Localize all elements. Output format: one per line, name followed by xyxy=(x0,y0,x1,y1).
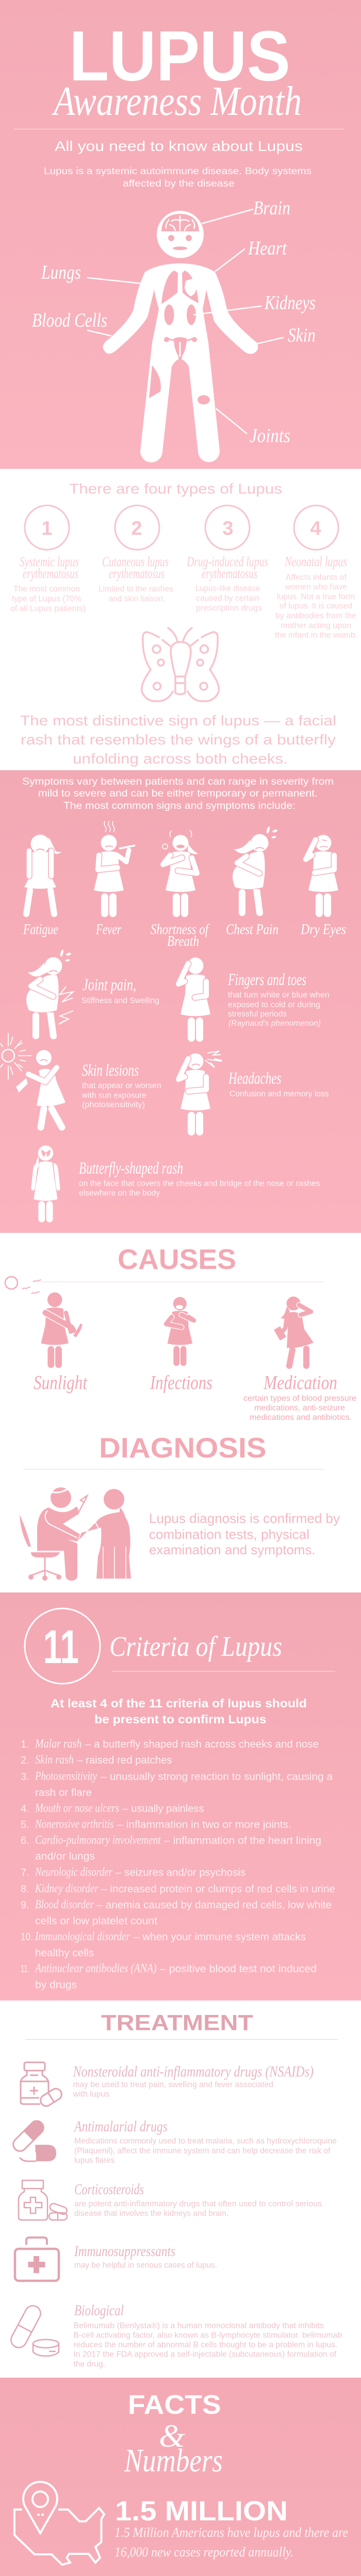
symptom: dry eyes: Dry Eyes xyxy=(300,921,346,938)
type 1: The most common xyxy=(13,585,80,594)
symptom: butterfly-shaped rash xyxy=(31,1145,320,1222)
symptom: joint pain: Stiffness and Swelling xyxy=(81,996,159,1005)
criteria list: – increased protein or clumps of red cells in urine xyxy=(101,1884,335,1895)
fact: 1.5 million: 1.5 MILLION xyxy=(115,2496,288,2527)
intro text: affected by the disease xyxy=(123,178,235,189)
heading: diagnosis: DIAGNOSIS xyxy=(99,1432,266,1464)
criteria list xyxy=(21,1737,335,1991)
panel: causes and diagnosis xyxy=(0,1233,361,1592)
heading: causes: CAUSES xyxy=(118,1243,236,1275)
criteria list: 11. xyxy=(21,1963,29,1975)
criteria list: rash or flare xyxy=(35,1787,92,1799)
treatment: NSAIDs xyxy=(21,2062,314,2108)
heading: Criteria of Lupus xyxy=(109,1631,282,1662)
symptom: fatigue: Fatigue xyxy=(23,921,58,938)
fact: 1.5 million xyxy=(14,2482,348,2565)
butterfly statement: rash that resembles the wings of a butterfly xyxy=(21,732,336,748)
symptom: butterfly-shaped rash: Butterfly-shaped rash xyxy=(79,1159,183,1178)
icon: first aid kit xyxy=(15,2238,59,2281)
intro heading: All you need to know about Lupus xyxy=(55,138,303,154)
symptom: headaches: Confusion and memory loss xyxy=(229,1090,329,1098)
type 3: prescription drugs xyxy=(196,604,262,613)
diagnosis text: Lupus diagnosis is confirmed by xyxy=(149,1511,340,1526)
symptom: dry eyes xyxy=(300,835,346,938)
treatment: antimalarial: (Plaquenil), affect the immune system and can help decrease the risk of xyxy=(74,2146,331,2155)
criteria summary: At least 4 of the 11 criteria of lupus should xyxy=(51,1697,307,1710)
badge: 11: 11 xyxy=(43,1621,79,1673)
label: Lungs xyxy=(41,262,140,283)
criteria list: 10. xyxy=(21,1931,33,1943)
symptom: joint pain xyxy=(26,950,159,1039)
treatment: biological xyxy=(8,2302,342,2368)
butterfly statement: unfolding across both cheeks. xyxy=(73,751,288,767)
symptom: shortness of breath: Breath xyxy=(167,933,199,950)
type 4: of lupus. It is caused xyxy=(280,602,352,611)
symptom: fingers and toes: (Raynaud's phenomenon) xyxy=(228,1019,321,1028)
symptom: fingers and toes: that turn white or blue when xyxy=(228,991,330,999)
label: Skin: Skin xyxy=(288,325,316,346)
intro text xyxy=(44,165,311,189)
symptom: skin lesions xyxy=(0,1033,161,1127)
icon: bottle with cross xyxy=(19,2180,68,2220)
symptom: skin lesions: (photosensitivity) xyxy=(82,1100,145,1109)
type 3: 3 xyxy=(222,518,234,539)
type 1: Systemic lupus xyxy=(20,554,79,569)
treatment: NSAIDs: may be used to treat pain, swelling and fever associated xyxy=(73,2080,273,2089)
treatment: NSAIDs: with lupus xyxy=(72,2090,110,2099)
treatment: antimalarial xyxy=(10,2118,337,2165)
label: Heart: Heart xyxy=(248,238,287,259)
criteria list: Nonerosive arthritis xyxy=(35,1818,113,1831)
cause: medication: Medication xyxy=(263,1372,337,1394)
label: Blood Cells: Blood Cells xyxy=(32,310,107,331)
cause: sunlight: Sunlight xyxy=(34,1372,88,1394)
criteria list: 5. xyxy=(21,1819,29,1831)
criteria list: Blood disorder xyxy=(35,1898,94,1911)
icon: thigh skin xyxy=(149,365,161,398)
butterfly statement: The most distinctive sign of lupus — a facial xyxy=(20,713,336,728)
symptom: fatigue xyxy=(23,835,62,938)
cause: medication: medications and antibiotics. xyxy=(250,1413,352,1422)
panel: treatment xyxy=(0,2001,361,2378)
symptom: fingers and toes xyxy=(178,958,330,1042)
icon: sun xyxy=(0,1033,31,1079)
symptom: fever xyxy=(94,821,135,938)
symptom: skin lesions: Skin lesions xyxy=(82,1061,139,1080)
treatment: biological: reduces the number of abnormal B cells thought to be a problem in lupus. xyxy=(73,2341,337,2349)
panel: facts and numbers xyxy=(0,2378,361,2576)
icon: capsule and jar xyxy=(8,2303,59,2356)
icon: body silhouette xyxy=(103,263,258,463)
type 1: 1 xyxy=(41,518,53,539)
type 3: Lupus-like disease xyxy=(195,584,260,593)
label: Lungs: Lungs xyxy=(41,262,81,283)
title: LUPUS xyxy=(69,16,290,96)
criteria list: and/or lungs xyxy=(35,1851,95,1862)
treatment: corticosteroids: disease that involves the kidneys and brain. xyxy=(74,2209,228,2218)
criteria list: – usually painless xyxy=(123,1803,204,1815)
symptom: shortness of breath: Shortness of xyxy=(151,921,210,938)
panel: four types of lupus xyxy=(0,469,361,770)
icon: doctor and patient xyxy=(20,1487,131,1581)
treatment: biological: In 2017 the FDA approved a self-injectable (subcutaneous) formulation of xyxy=(73,2350,337,2359)
icon: head xyxy=(157,211,204,258)
icon: heart xyxy=(185,278,196,296)
criteria list: Photosensitivity xyxy=(35,1770,97,1783)
treatment: biological: Belimumab (Benlysta®) is a human monoclonal antibody that inhibits xyxy=(73,2321,324,2330)
symptom: shortness of breath xyxy=(151,831,210,950)
type 3: caused by certain xyxy=(196,594,259,603)
treatment: biological: the drug. xyxy=(73,2360,105,2368)
heading: FACTS xyxy=(128,2390,221,2420)
criteria list: Kidney disorder xyxy=(35,1882,99,1895)
panel: symptoms xyxy=(0,770,361,1233)
criteria list: – when your immune system attacks xyxy=(134,1931,306,1943)
icon: lungs xyxy=(161,270,199,304)
criteria list: Cardio-pulmonary involvement xyxy=(35,1834,161,1847)
panel: 11 criteria of lupus xyxy=(0,1592,361,2001)
treatment: biological: B-cell activating factor, also known as B-lymphocyte stimulator. belimumab xyxy=(73,2331,342,2340)
badge: 11 xyxy=(25,1608,100,1684)
symptom: joint pain: Joint pain, xyxy=(83,976,136,994)
treatment: biological: Biological xyxy=(74,2302,124,2319)
icon: knee joint xyxy=(198,395,210,404)
criteria list: – seizures and/or psychosis xyxy=(116,1867,245,1878)
symptoms intro: mild to severe and can be either temporary or permanent. xyxy=(38,788,318,799)
symptom: fingers and toes: stressful periods xyxy=(228,1010,287,1019)
type 1: of all Lupus patients) xyxy=(10,604,86,613)
cause: medication: medications, anti-seizure xyxy=(254,1403,345,1413)
criteria list: – inflammation of the heart lining xyxy=(164,1835,321,1846)
criteria list: 7. xyxy=(21,1867,29,1878)
symptom: chest pain xyxy=(226,826,278,938)
symptom: headaches xyxy=(178,1051,329,1136)
symptom: skin lesions: that appear or worsen xyxy=(82,1081,161,1090)
criteria summary: be present to confirm Lupus xyxy=(94,1713,266,1726)
treatment: immunosuppressants: Immunosuppressants xyxy=(74,2243,175,2260)
cause: medication: certain types of blood pressure xyxy=(243,1394,356,1403)
symptom: fever: Fever xyxy=(95,921,122,938)
type 4: the infant in the womb. xyxy=(275,631,357,640)
symptom: fingers and toes: Fingers and toes xyxy=(227,971,306,989)
treatment: corticosteroids: are potent anti-inflammatory drugs that often used to control serious xyxy=(74,2200,322,2209)
type 1: erythematosus xyxy=(23,566,78,581)
icon: capsules xyxy=(10,2118,56,2161)
label: Heart xyxy=(215,238,287,272)
criteria list: by drugs xyxy=(35,1979,77,1991)
cause: sunlight xyxy=(5,1277,88,1394)
criteria list: – unusually strong reaction to sunlight, causing a xyxy=(101,1771,333,1783)
criteria list: 1. xyxy=(21,1739,29,1750)
intro text: Lupus is a systemic autoimmune disease. Body systems xyxy=(44,165,311,176)
type 2 xyxy=(99,505,173,603)
treatment: corticosteroids xyxy=(19,2180,322,2220)
label: Joints xyxy=(216,409,290,447)
label: Joints: Joints xyxy=(250,425,290,447)
icon: uterus xyxy=(164,337,197,359)
criteria list: 8. xyxy=(21,1884,29,1895)
symptoms intro: The most common signs and symptoms include: xyxy=(63,801,296,811)
type 2: Cutaneous lupus xyxy=(102,554,169,569)
treatment: immunosuppressants xyxy=(15,2238,217,2281)
symptom: skin lesions: with sun exposure xyxy=(81,1091,146,1100)
diagnosis text xyxy=(149,1511,340,1557)
treatment: antimalarial: Antimalarial drugs xyxy=(73,2118,168,2135)
heading: TREATMENT xyxy=(101,2011,253,2036)
type 2: and skin liaison. xyxy=(109,595,165,603)
criteria list: 6. xyxy=(21,1835,29,1846)
treatment: antimalarial: lupus flares xyxy=(74,2156,114,2165)
type 4: by antibodies from the xyxy=(275,612,356,620)
symptom: butterfly-shaped rash: elsewhere on the body xyxy=(79,1189,160,1197)
criteria list: – inflammation in two or more joints. xyxy=(117,1819,291,1831)
symptom: butterfly-shaped rash: on the face that covers the cheeks and bridge of the nose or rashes xyxy=(79,1179,320,1188)
type 1 xyxy=(10,505,86,613)
type 4: 4 xyxy=(310,518,321,539)
criteria list: healthy cells xyxy=(35,1947,94,1959)
criteria list: Immunological disorder xyxy=(35,1930,130,1943)
cause: infections: Infections xyxy=(150,1372,212,1394)
fact: 1.5 million: 16,000 new cases reported annually. xyxy=(114,2545,293,2560)
criteria list: – a butterfly shaped rash across cheeks and nose xyxy=(85,1739,319,1750)
type 4: mother acting upon xyxy=(281,621,351,630)
type 3: erythematosus xyxy=(202,566,257,581)
symptoms intro: Symptoms vary between patients and can range in severity from xyxy=(22,776,334,787)
treatment: immunosuppressants: may be helpful in serious cases of lupus. xyxy=(74,2261,217,2270)
type 3 xyxy=(186,505,268,613)
subtitle: Awareness Month xyxy=(52,79,302,124)
criteria list: Antinuclear antibodies (ANA) xyxy=(34,1962,157,1975)
criteria summary xyxy=(51,1697,307,1726)
label: Brain: Brain xyxy=(253,197,290,219)
symptoms intro xyxy=(22,776,334,811)
type 4 xyxy=(275,505,357,640)
type 3: Drug-induced lupus xyxy=(186,554,268,569)
type 4: women who have xyxy=(285,583,347,591)
diagnosis text: examination and symptoms. xyxy=(149,1542,316,1557)
diagnosis text: combination tests, physical xyxy=(149,1527,309,1542)
cause: infections xyxy=(150,1297,212,1394)
treatment: corticosteroids: Corticosteroids xyxy=(74,2181,144,2198)
criteria list: Mouth or nose ulcers xyxy=(35,1802,119,1815)
criteria list: Skin rash xyxy=(35,1753,74,1767)
icon: bottle and pill xyxy=(21,2062,63,2108)
type 2: 2 xyxy=(131,518,142,539)
panel: hero xyxy=(0,0,361,469)
criteria list: 2. xyxy=(21,1755,29,1766)
symptom: chest pain: Chest Pain xyxy=(226,921,278,938)
symptom: headaches: Headaches xyxy=(228,1070,282,1088)
treatment: antimalarial: Medications commonly used to treat malaria, such as hydroxychloroquine xyxy=(74,2137,337,2146)
icon: US map with pin xyxy=(14,2482,104,2565)
heading: & xyxy=(159,2419,185,2454)
criteria list: – anemia caused by damaged red cells, low white xyxy=(97,1900,332,1911)
butterfly statement xyxy=(20,713,336,767)
heading: There are four types of Lupus xyxy=(69,481,282,497)
criteria list: Malar rash xyxy=(35,1737,81,1751)
criteria list: – positive blood test not induced xyxy=(160,1963,317,1975)
criteria list: 3. xyxy=(21,1771,29,1783)
criteria list: cells or low platelet count xyxy=(35,1916,157,1927)
label: Kidneys xyxy=(193,292,316,315)
type 2: erythematosus xyxy=(109,566,165,581)
icon: butterfly xyxy=(142,628,219,701)
criteria list: – raised red patches xyxy=(77,1755,172,1766)
label: Skin xyxy=(257,325,316,346)
type 4: lupus. Not a true form xyxy=(277,592,355,601)
type 1: type of Lupus (70% xyxy=(12,595,81,603)
criteria list: 9. xyxy=(21,1900,29,1911)
label: Brain xyxy=(202,197,290,224)
criteria list: 4. xyxy=(21,1803,29,1815)
type 2: Limited to the rashes xyxy=(99,585,173,594)
heading xyxy=(124,2390,223,2479)
symptom: fingers and toes: exposed to cold or during xyxy=(228,1001,320,1009)
type 4: Affects infants of xyxy=(286,573,347,582)
label: Kidneys: Kidneys xyxy=(264,292,316,314)
icon: kidneys xyxy=(164,304,196,325)
cause: medication xyxy=(243,1296,356,1422)
criteria list: Neurologic disorder xyxy=(35,1866,113,1879)
heading: Numbers xyxy=(124,2442,223,2479)
body diagram xyxy=(32,197,316,463)
